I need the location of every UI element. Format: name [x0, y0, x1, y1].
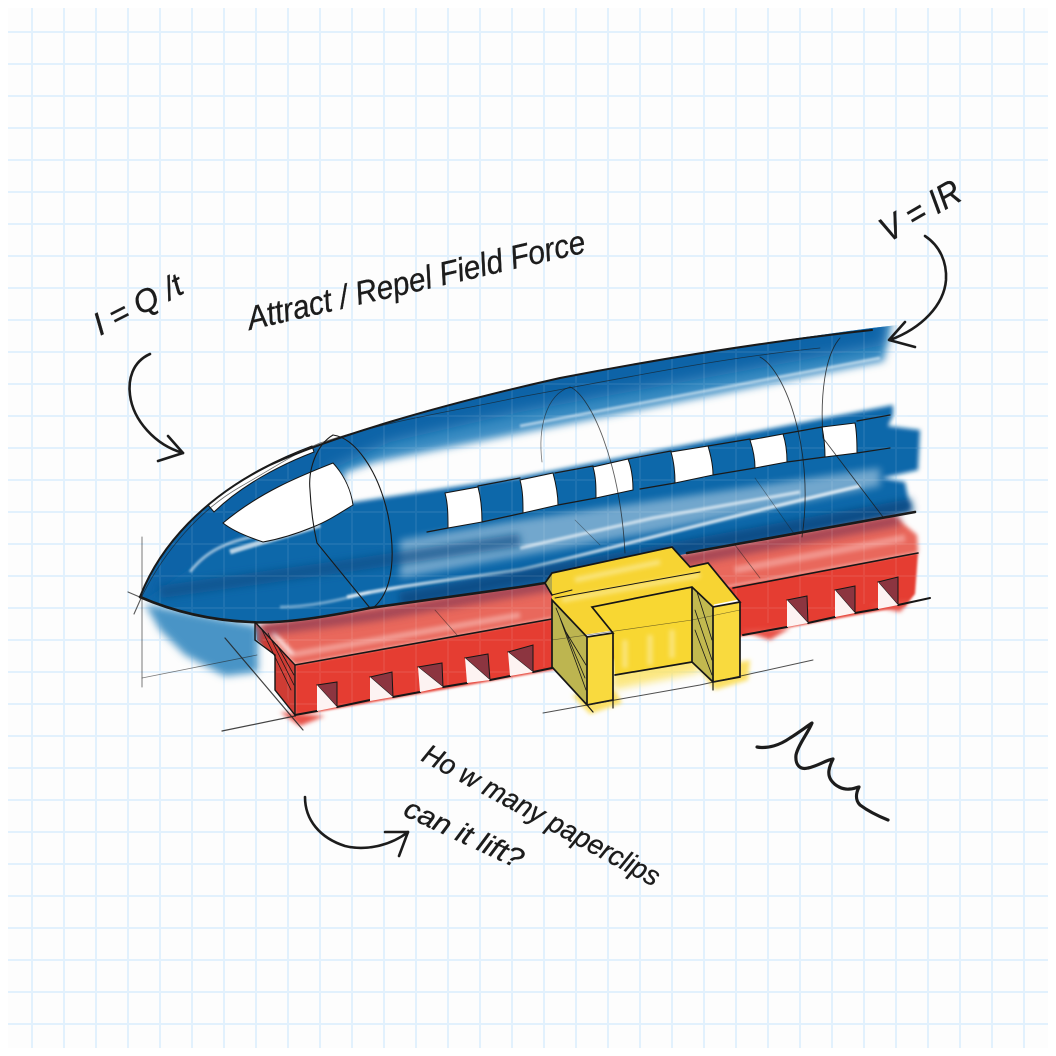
label: can it lift?: can it lift?: [399, 792, 529, 875]
arrow: current to train nose: [130, 354, 183, 461]
upper band fade: [142, 326, 895, 597]
window band lines: [478, 415, 890, 486]
window 4: [671, 446, 713, 483]
highlights on rail top: [272, 538, 905, 655]
lower band: [130, 405, 920, 630]
magnet paint overspray: [612, 630, 700, 690]
rail shadow below train: [262, 520, 900, 630]
notch 4: [465, 654, 490, 680]
white streaks: [190, 486, 860, 607]
roof window strip: [208, 446, 314, 512]
label: V = IR: V = IR: [872, 172, 968, 250]
notch 8: [878, 577, 898, 605]
notch 7: [835, 586, 855, 613]
windshield: [223, 463, 353, 542]
label: I = Q/t: I = Q /t: [87, 266, 190, 342]
rail top surface: [258, 515, 918, 665]
magnet inner front face: [592, 587, 692, 675]
arrow: voltage to train roof: [889, 236, 946, 347]
window 2: [520, 473, 558, 513]
notch 1: [317, 682, 337, 707]
faint grid showing through paint: [150, 332, 918, 711]
rail line work and notches: [255, 553, 930, 715]
notch 5: [508, 645, 533, 672]
magnet left leg front: [587, 633, 613, 705]
train body paint: [142, 325, 924, 622]
magnet line work: [545, 547, 740, 712]
bottom contour: [140, 512, 915, 622]
upper band streak: [520, 358, 880, 426]
magnet highlights: [586, 601, 739, 636]
train line work: [140, 330, 915, 635]
light stripe: [400, 468, 880, 578]
window 5: [750, 434, 787, 468]
upper band dark: [142, 325, 899, 599]
label: How many paperclips: Ho w many paperclips: [417, 738, 666, 892]
notch 2: [370, 672, 393, 697]
magnet left side face: [552, 600, 587, 705]
magnet top surface: [552, 547, 740, 637]
panel seams: [575, 478, 795, 545]
squiggle mark: [757, 723, 888, 820]
notch 6: [787, 596, 808, 623]
window 3: [593, 459, 633, 498]
window 1: [445, 487, 482, 528]
ground construction lines: [128, 537, 813, 731]
magnet right inner side face: [692, 587, 713, 682]
top contour: [140, 330, 872, 597]
windows: [208, 423, 857, 542]
rail left face: [255, 622, 295, 715]
carriage ring 1: [310, 435, 370, 608]
rail edges: [255, 553, 930, 715]
window 6: [822, 423, 857, 457]
label: Attract / Repel Field Force: Attract / Repel Field Force: [241, 223, 589, 337]
carriage ring 2: [541, 387, 570, 462]
rail front face: [295, 553, 918, 716]
yellow magnet: [545, 547, 750, 714]
inner roof line: [142, 348, 820, 596]
small dark back face: [545, 573, 572, 595]
red guide rail: [255, 515, 918, 726]
blue shadow under the nose: [145, 604, 258, 676]
arrow: toward paperclip note: [305, 797, 408, 856]
carriage ring 3: [760, 357, 805, 537]
notch 3: [418, 663, 443, 687]
dark streaks: [160, 506, 912, 600]
magnet right leg front: [713, 602, 740, 682]
